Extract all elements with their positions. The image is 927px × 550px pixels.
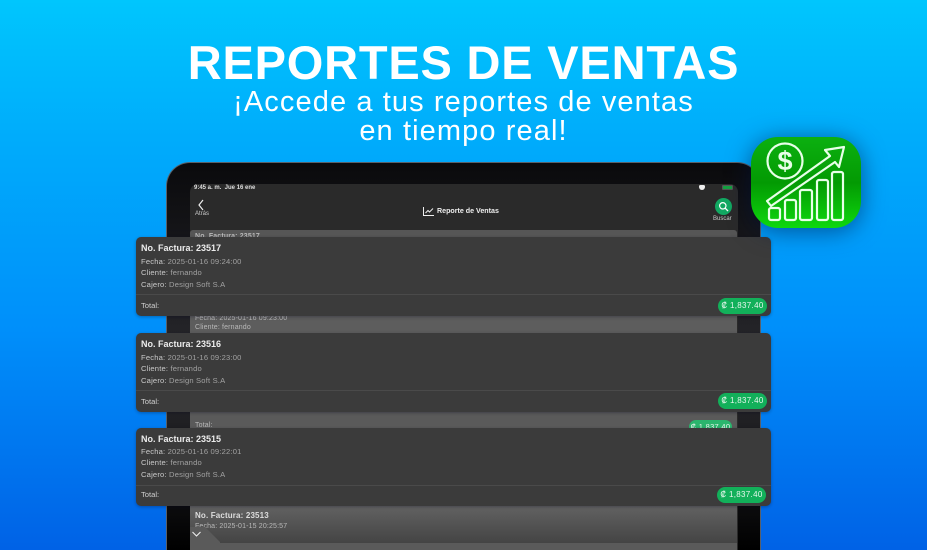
total amount: ₡ 1,837.40 bbox=[720, 490, 763, 499]
icon: line chart bbox=[423, 207, 434, 216]
invoice cashier: Cajero: Design Soft S.A bbox=[141, 470, 225, 479]
tablet device bbox=[166, 162, 761, 550]
row date: Fecha: 2025-01-15 20:25:57 bbox=[195, 523, 287, 530]
invoice card 23516 bbox=[136, 333, 771, 412]
subtitle bbox=[233, 86, 694, 146]
total amount bbox=[717, 487, 766, 503]
invoice client: Cliente: fernando bbox=[141, 458, 202, 467]
invoice card 23515 bbox=[136, 428, 771, 506]
icon: battery bbox=[722, 185, 733, 190]
status bar: 9:45 a. m. Jue 16 ene bbox=[194, 185, 255, 191]
total amount: ₡ 1,837.40 bbox=[721, 301, 764, 310]
total label: Total: bbox=[141, 397, 159, 406]
icon: back chevron bbox=[198, 200, 204, 210]
background list row 2 bbox=[190, 312, 737, 338]
row amount: ₡ 1,837.40 bbox=[691, 422, 730, 431]
invoice card 23517 bbox=[136, 237, 771, 316]
invoice client: Cliente: fernando bbox=[141, 268, 202, 277]
invoice cashier: Cajero: Design Soft S.A bbox=[141, 280, 225, 289]
row date: Fecha: 2025-01-16 09:23:00 bbox=[195, 315, 287, 322]
subtitle: en tiempo real! bbox=[359, 114, 568, 146]
tablet screen bbox=[190, 184, 738, 550]
row heading: No. Factura: 23513 bbox=[195, 511, 269, 520]
total amount bbox=[718, 393, 767, 409]
row amount bbox=[689, 420, 732, 434]
invoice date: Fecha: 2025-01-16 09:22:01 bbox=[141, 447, 242, 456]
status icons bbox=[699, 185, 733, 190]
heading text: Reporte de Ventas bbox=[437, 207, 499, 215]
search button bbox=[713, 198, 732, 222]
invoice number: No. Factura: 23516 bbox=[141, 339, 221, 349]
invoice cashier: Cajero: Design Soft S.A bbox=[141, 376, 225, 385]
invoice date: Fecha: 2025-01-16 09:24:00 bbox=[141, 257, 242, 266]
total amount: ₡ 1,837.40 bbox=[721, 396, 764, 405]
back button bbox=[195, 200, 209, 217]
app icon: sales growth bbox=[736, 124, 877, 247]
icon: wifi bbox=[699, 185, 705, 190]
row heading: No. Factura: 23517 bbox=[195, 233, 260, 240]
total amount bbox=[718, 298, 767, 314]
invoice date: Fecha: 2025-01-16 09:23:00 bbox=[141, 353, 242, 362]
search label: Buscar bbox=[713, 216, 732, 222]
screen heading bbox=[423, 207, 499, 216]
background list row 5 bbox=[190, 543, 737, 550]
icon: search bbox=[715, 198, 732, 215]
scroll-down control bbox=[190, 527, 220, 543]
invoice client: Cliente: fernando bbox=[141, 364, 202, 373]
row client: Cliente: fernando bbox=[195, 324, 251, 331]
total label: Total: bbox=[141, 490, 159, 499]
background list row 3 bbox=[190, 408, 737, 432]
background list row 1 bbox=[190, 230, 737, 242]
row total: Total: bbox=[195, 422, 213, 429]
background list row 4 bbox=[190, 506, 737, 543]
app icon: sales growth: $ bbox=[777, 146, 793, 176]
invoice number: No. Factura: 23515 bbox=[141, 434, 221, 444]
subtitle: ¡Accede a tus reportes de ventas bbox=[233, 86, 694, 118]
icon: down chevron bbox=[192, 532, 201, 537]
invoice number: No. Factura: 23517 bbox=[141, 243, 221, 253]
title: REPORTES DE VENTAS bbox=[188, 36, 739, 89]
back label: Atrás bbox=[195, 211, 209, 217]
total label: Total: bbox=[141, 301, 159, 310]
